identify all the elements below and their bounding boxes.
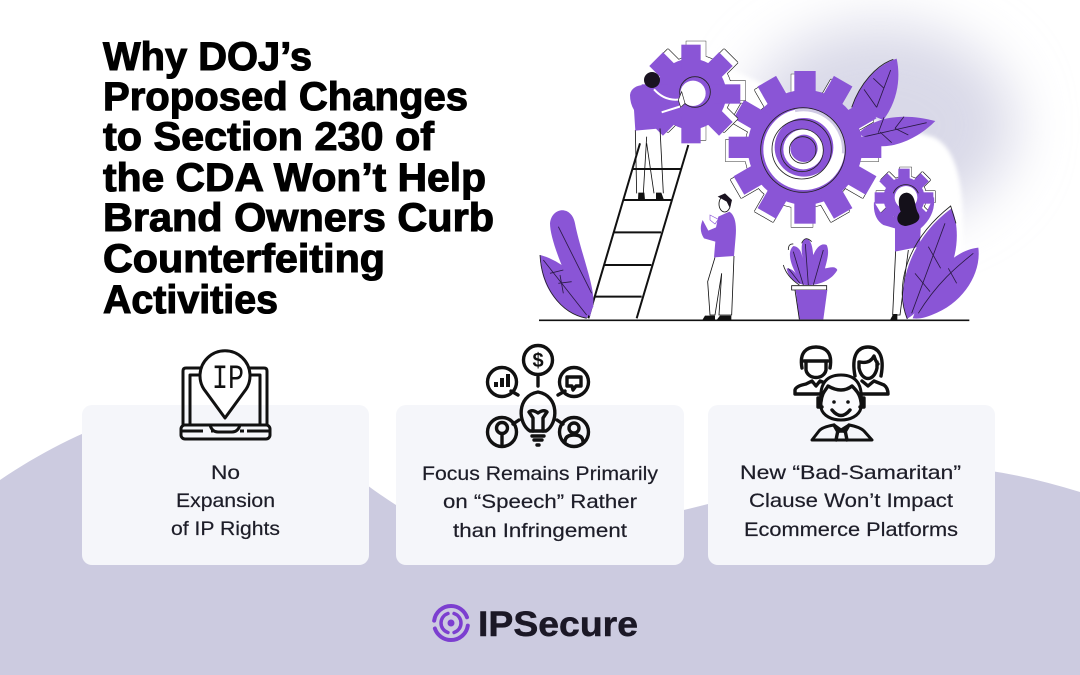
card 2 text: on “Speech” Rather bbox=[443, 491, 638, 513]
title: Brand Owners Curb bbox=[103, 196, 494, 240]
ground line bbox=[539, 318, 969, 323]
card 2 text: Focus Remains Primarily bbox=[422, 463, 658, 485]
title: Why DOJ’s bbox=[103, 35, 312, 79]
card 3 text bbox=[740, 462, 961, 541]
large central gear bbox=[726, 71, 881, 227]
card 1 text bbox=[171, 462, 280, 540]
card 3 text: New “Bad-Samaritan” bbox=[740, 462, 961, 484]
title: Activities bbox=[103, 278, 278, 322]
title: the CDA Won’t Help bbox=[103, 156, 486, 200]
card 2 text bbox=[422, 463, 658, 542]
card 2 text: than Infringement bbox=[453, 520, 628, 542]
card 2: focus on speech bbox=[396, 405, 684, 565]
icon: lightbulb with idea bubbles: $ bbox=[532, 350, 544, 372]
leaves behind big gear bbox=[852, 59, 935, 146]
icon: lightbulb with idea bubbles bbox=[488, 346, 588, 446]
card 3 text: Ecommerce Platforms bbox=[744, 519, 958, 541]
card 3: bad samaritan bbox=[708, 405, 995, 565]
icon: laptop with IP pin bbox=[181, 351, 270, 439]
card 1 text: No bbox=[211, 462, 240, 484]
title: to Section 230 of bbox=[103, 115, 435, 159]
illustration: team assembling gears bbox=[539, 41, 979, 320]
logo: IPSecure: IPSecure bbox=[478, 605, 638, 644]
card 3 text: Clause Won’t Impact bbox=[749, 490, 954, 512]
worker on ladder: legs bbox=[635, 128, 663, 193]
logo mark bbox=[434, 606, 468, 640]
icon: three people bbox=[795, 347, 888, 440]
worker with small gear bbox=[874, 193, 934, 320]
standing worker bbox=[701, 193, 736, 320]
ladder bbox=[588, 143, 688, 318]
right leaf cluster bbox=[902, 206, 979, 319]
potted plant bbox=[783, 238, 837, 319]
upper left gear bbox=[642, 41, 745, 143]
title: Counterfeiting bbox=[103, 237, 385, 281]
title bbox=[103, 35, 494, 322]
icon: laptop with IP pin: IP bbox=[212, 361, 244, 399]
title: Proposed Changes bbox=[103, 75, 468, 119]
card 1 text: Expansion bbox=[176, 490, 275, 512]
left leaf cluster bbox=[540, 210, 593, 318]
worker on ladder: torso and head bbox=[630, 72, 685, 200]
card 1: no expansion bbox=[82, 405, 369, 565]
small right gear bbox=[875, 167, 935, 227]
card 1 text: of IP Rights bbox=[171, 518, 280, 540]
background glow bbox=[640, 25, 1015, 335]
lavender wave background bbox=[0, 405, 1080, 675]
